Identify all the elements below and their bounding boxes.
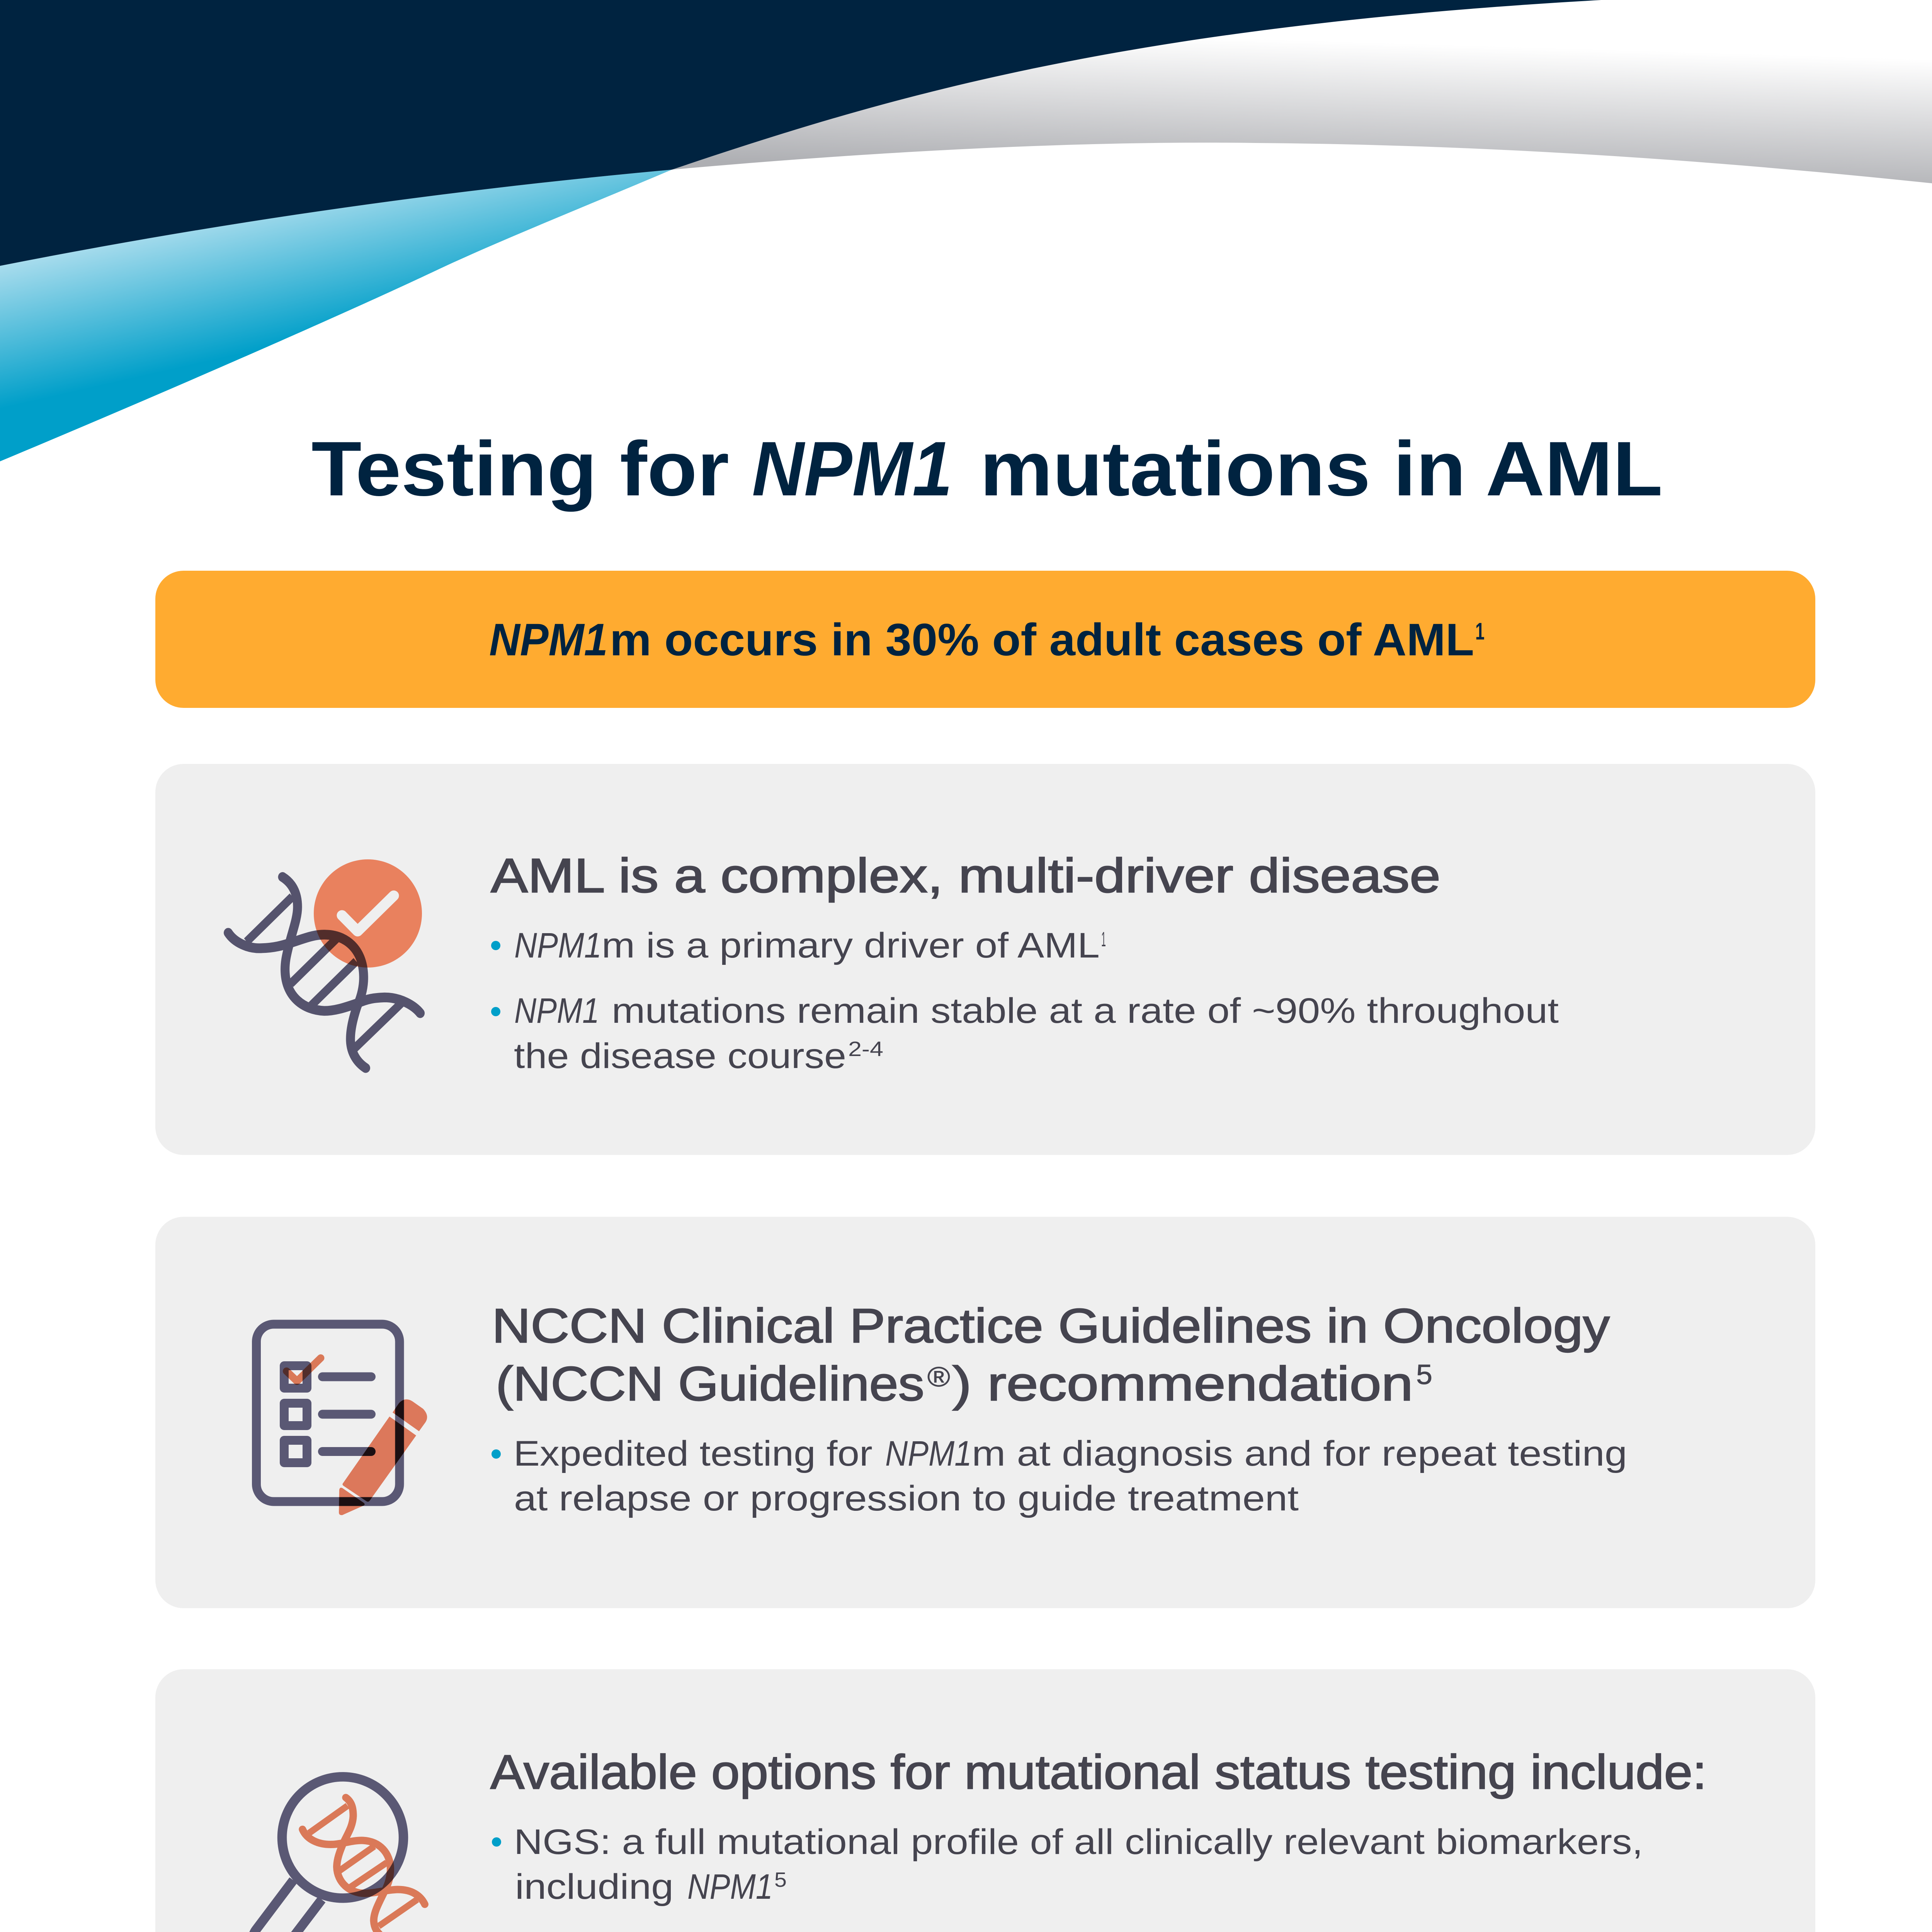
icon: checklist with pencil [257,1324,427,1515]
navy swoosh [0,0,1601,266]
heading [492,1299,1610,1411]
bullet: NGS: NPM1 [687,1867,773,1906]
bullet: mutations stable: NPM1 [514,991,599,1031]
title: NPM1 [752,426,952,512]
bullet: mutations stable [491,991,1559,1076]
heading: (NCCN Guidelines [496,1357,924,1411]
bullet: expedited testing [492,1434,1627,1518]
bullet: primary driver: m is a primary driver of AML [602,926,1100,965]
bullet: expedited testing: m at diagnosis and for repeat testing [972,1434,1627,1473]
bullet: mutations stable: mutations remain stable at a rate of ~90% throughout [612,991,1559,1031]
heading: ® [927,1362,950,1393]
bullet: NGS: including [515,1867,673,1906]
grey swoosh [672,0,1932,187]
icon: DNA with check mark [228,859,422,1068]
banner: NPM1m occurrence: 1 [1475,618,1485,645]
panel: complex multi-driver disease [155,764,1815,1155]
banner: NPM1m occurrence: m occurs in 30% of adult cases of AML [610,614,1474,665]
bullet: NGS [492,1822,1643,1906]
title [311,426,1663,512]
heading: NCCN Clinical Practice Guidelines in Oncology [492,1299,1610,1353]
bullet: NGS: NGS: a full mutational profile of all clinically relevant biomarkers, [514,1822,1643,1862]
bullet: mutations stable: 2-4 [848,1037,883,1061]
heading: ) recommendation [952,1357,1413,1411]
bullet: mutations stable: the disease course [514,1036,846,1076]
banner: NPM1m occurrence [155,571,1815,708]
bullet: primary driver: NPM1 [514,926,602,965]
header wave graphic [0,0,1932,461]
blue swoosh [0,170,672,461]
panel: complex multi-driver disease: 1 [1101,928,1106,951]
title: Testing for [311,426,729,512]
heading: 5 [1416,1359,1432,1390]
title: mutations in AML [980,426,1663,512]
bullet: expedited testing: NPM1 [885,1434,972,1473]
panel: testing options [155,1669,1815,1932]
bullet: expedited testing: Expedited testing for [514,1434,872,1473]
bullet: expedited testing: at relapse or progression to guide treatment [514,1479,1299,1518]
panel: NCCN guidelines recommendation [155,1217,1815,1608]
heading: Available options for mutational status testing include: [490,1745,1707,1799]
banner: NPM1m occurrence: NPM1 [489,614,608,665]
heading: AML is a complex, multi-driver disease [491,849,1440,903]
icon: magnifier with DNA [253,1777,425,1932]
bullet: NGS: 5 [774,1868,787,1891]
